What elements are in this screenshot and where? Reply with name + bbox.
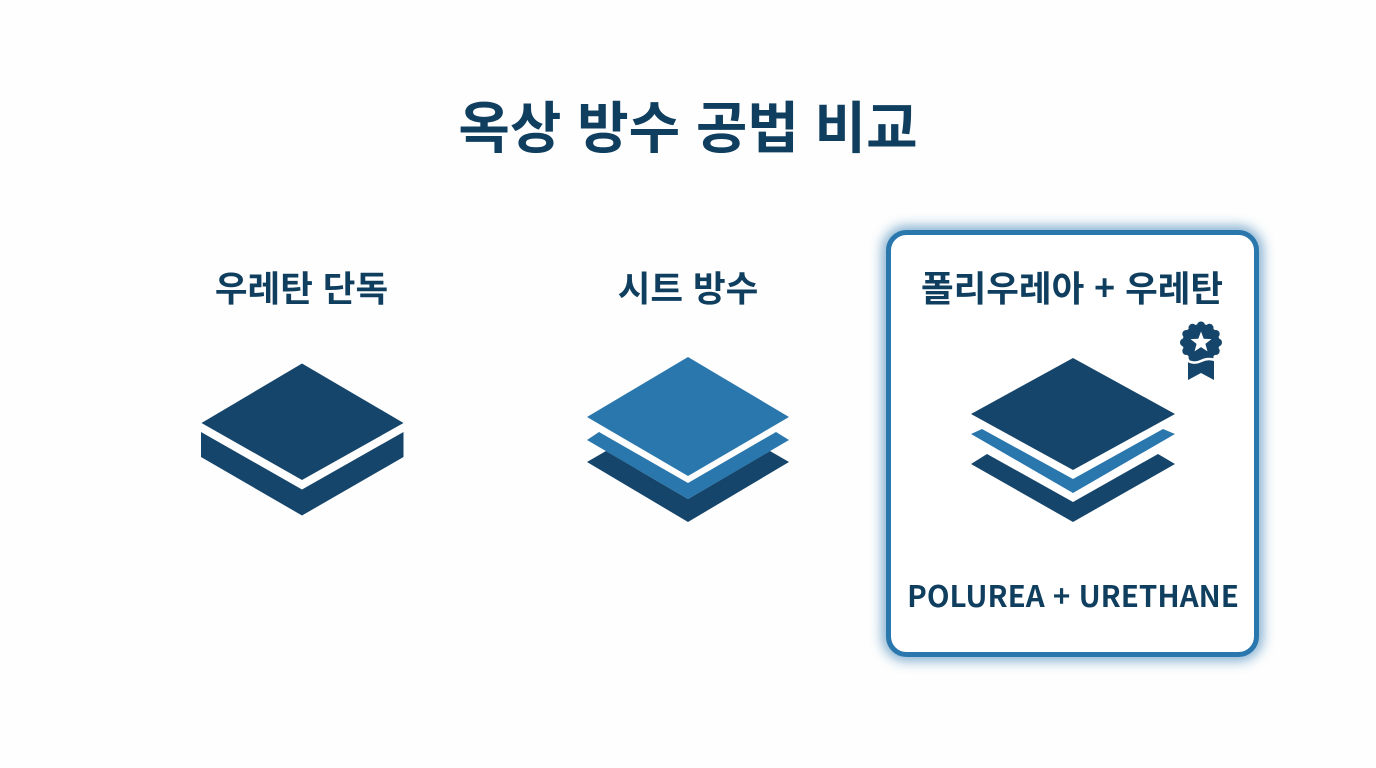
- icon: sheet layers: [587, 357, 789, 522]
- heading: polyurea + urethane: 폴리우레아 + 우레탄: [921, 261, 1223, 312]
- card frame: [888, 232, 1256, 654]
- panel: urethane only: [201, 261, 404, 516]
- panel: polyurea + urethane (highlighted): [888, 232, 1256, 654]
- panel: sheet waterproofing: [587, 261, 789, 522]
- icon: single thick layer: [201, 364, 404, 516]
- title: 옥상 방수 공법 비교: [458, 84, 918, 165]
- heading: urethane only: 우레탄 단독: [215, 261, 388, 312]
- heading: sheet waterproofing: 시트 방수: [618, 261, 758, 312]
- card glow: [888, 232, 1256, 654]
- English label: POLUREA + URETHANE: [907, 574, 1239, 616]
- icon: award badge: [1180, 322, 1222, 380]
- icon: polyurea + urethane layers: [971, 358, 1175, 522]
